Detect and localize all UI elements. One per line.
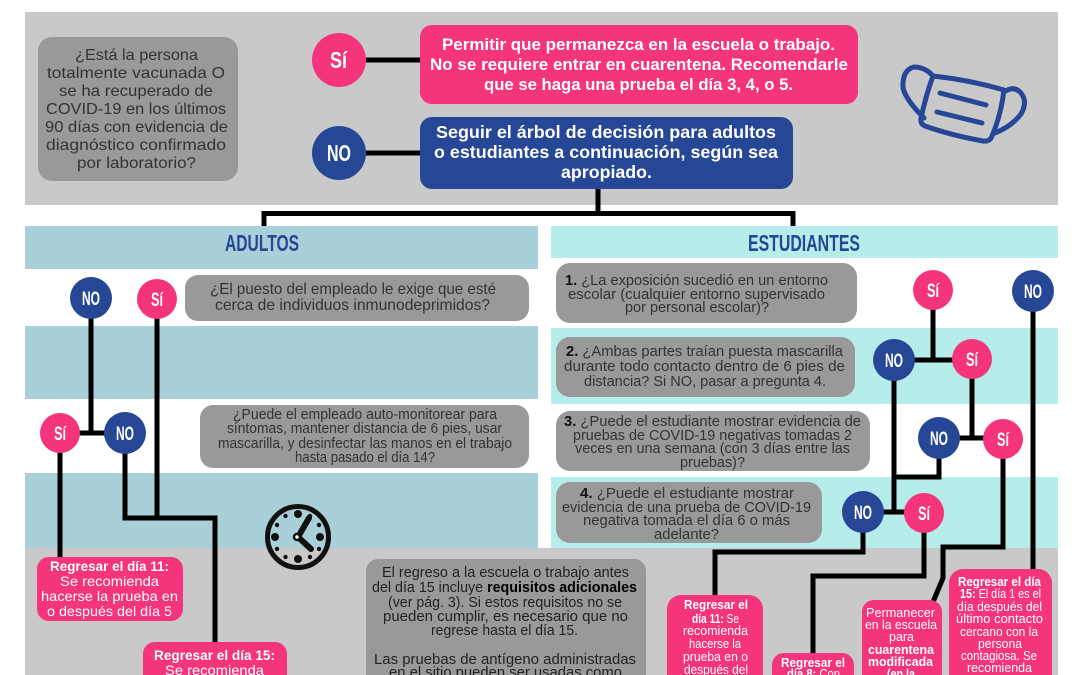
outcome: modified quarantine: para xyxy=(889,630,914,644)
callout: follow decision tree xyxy=(420,117,793,189)
question 4: students: negativa tomada el día 6 o más xyxy=(583,512,790,529)
badge: adults no 1 xyxy=(70,277,112,319)
question 4: students: 4. ¿Puede el estudiante mostrar xyxy=(580,485,794,502)
question: vaccinated or recovered: ¿Está la persona xyxy=(75,47,198,64)
question: adults self-monitor: mascarilla, y desinfectar las manos en el trabajo xyxy=(218,436,512,452)
question: adults self-monitor xyxy=(200,405,529,468)
connector lines: students tree xyxy=(715,290,1033,655)
outcome: modified quarantine: Permanecer xyxy=(866,606,935,620)
question: vaccinated or recovered: COVID-19 en los últimos xyxy=(46,101,226,118)
badge: top yes: Sí xyxy=(330,47,348,73)
callout: follow decision tree: Seguir el árbol de decisión para adultos xyxy=(436,122,776,142)
note: additional requirements: Las pruebas de antígeno administradas xyxy=(374,652,636,668)
panel: top vaccination question xyxy=(25,12,1058,205)
badge: student q4 yes xyxy=(904,493,944,533)
question 4: students: adelante? xyxy=(654,526,719,543)
outcome: adults return day 15: Regresar el día 15: xyxy=(154,647,275,663)
badge: student q3 no: NO xyxy=(930,429,948,450)
badge: adults no 1: NO xyxy=(82,289,100,310)
badge: student q1 no: NO xyxy=(1024,282,1042,303)
outcome: adults return day 11: o después del día 5 xyxy=(47,603,172,619)
note: additional requirements: (ver pág. 3). Si estos requisitos no se xyxy=(388,595,622,611)
outcome: adults return day 11 xyxy=(37,557,183,621)
outcome: students return day 15: día después del xyxy=(957,600,1042,614)
question: vaccinated or recovered: se ha recuperado de xyxy=(59,83,213,100)
badge: student q4 no xyxy=(842,491,884,533)
badge: adults yes 1: Sí xyxy=(151,290,163,311)
question 3: students: pruebas de COVID-19 negativas tomadas 2 xyxy=(573,427,852,444)
callout: follow decision tree: o estudiantes a continuación, según sea xyxy=(434,142,778,162)
question 4: students xyxy=(556,482,822,543)
callout: stay at school or work: No se requiere entrar en cuarentena. Recomendarle xyxy=(430,55,848,74)
question 1: students: 1. ¿La exposición sucedió en un entorno xyxy=(565,272,828,289)
outcome: adults return day 11: Se recomienda xyxy=(60,573,159,589)
question: vaccinated or recovered: diagnóstico confirmado xyxy=(46,137,226,154)
callout: stay at school or work: que se haga una prueba el día 3, 4, o 5. xyxy=(484,75,793,94)
badge: top yes xyxy=(312,33,366,87)
question: adults job: cerca de individuos inmunodeprimidos? xyxy=(215,297,490,314)
callout: follow decision tree: apropiado. xyxy=(561,162,652,182)
panel: adults header xyxy=(25,226,538,269)
badge: student q2 no xyxy=(873,339,915,381)
outcome: adults return day 11: hacerse la prueba en xyxy=(41,588,178,604)
badge: student q3 yes: Sí xyxy=(997,430,1009,451)
icon: clock xyxy=(268,506,328,568)
outcome: adults return day 15 xyxy=(143,642,287,675)
question 1: students: escolar (cualquier entorno supervisado xyxy=(568,286,825,303)
note: additional requirements xyxy=(366,559,646,675)
panel: students header xyxy=(551,226,1058,258)
badge: student q3 no xyxy=(918,417,960,459)
badge: student q2 yes: Sí xyxy=(966,350,978,371)
question 2: students: 2. ¿Ambas partes traían puesta mascarilla xyxy=(566,343,844,360)
badge: student q2 yes xyxy=(952,339,992,379)
panel: adults band 2 xyxy=(25,326,538,399)
outcome: students return day 8: Regresar el xyxy=(781,656,845,670)
badge: student q4 no: NO xyxy=(854,503,872,524)
badge: student q1 yes xyxy=(913,270,953,310)
badge: adults yes 2: Sí xyxy=(54,424,66,445)
outcome: students return day 15: último contacto xyxy=(956,612,1043,626)
badge: student q4 yes: Sí xyxy=(918,504,930,525)
outcome: modified quarantine: cuarentena xyxy=(868,643,935,657)
badge: top no xyxy=(312,126,366,180)
question: vaccinated or recovered: totalmente vacunada O xyxy=(47,65,225,82)
outcome: students return day 15: persona xyxy=(978,637,1022,651)
badge: adults yes 1 xyxy=(137,279,177,319)
question 3: students xyxy=(556,411,870,471)
outcome: students return day 15: recomienda xyxy=(967,661,1032,675)
outcome: students return day 11 xyxy=(667,595,763,675)
panel: students band 4 xyxy=(551,477,1058,548)
connector lines: top tree xyxy=(264,60,793,226)
question 4: students: evidencia de una prueba de COVID-19 xyxy=(562,499,811,516)
badge: student q2 no: NO xyxy=(885,351,903,372)
outcome: modified quarantine: modificada xyxy=(868,655,934,669)
question 1: students: por personal escolar)? xyxy=(625,299,769,316)
badge: adults no 2: NO xyxy=(116,424,134,445)
outcome: students return day 11: Regresar el xyxy=(684,598,748,612)
outcome: students return day 15: Regresar el día xyxy=(958,575,1042,589)
question 3: students: pruebas)? xyxy=(680,454,745,471)
question: adults self-monitor: síntomas, mantener distancia de 6 pies, usar xyxy=(227,421,502,437)
badge: student q3 yes xyxy=(983,419,1023,459)
badge: top no: NO xyxy=(327,140,351,166)
panel: students band 2 xyxy=(551,328,1058,404)
panel: adults band 4 xyxy=(25,473,538,548)
question 2: students: durante todo contacto dentro de 6 pies de xyxy=(564,358,845,375)
question 3: students: 3. ¿Puede el estudiante mostrar evidencia de xyxy=(564,413,861,430)
question: adults job xyxy=(185,275,529,321)
callout: stay at school or work: Permitir que permanezca en la escuela o trabajo. xyxy=(442,35,835,54)
outcome: students return day 11: prueba en o xyxy=(683,650,748,664)
connector lines: adults tree xyxy=(60,298,215,645)
panel: bottom outcomes xyxy=(25,548,1058,675)
question 2: students: distancia? Si NO, pasar a pregunta 4. xyxy=(584,373,826,390)
outcome: students return day 15: cercano con la xyxy=(960,625,1038,639)
badge: student q1 yes: Sí xyxy=(927,281,939,302)
question 3: students: veces en una semana (con 3 días entre las xyxy=(575,440,850,457)
badge: adults yes 2 xyxy=(40,413,80,453)
outcome: modified quarantine: en la escuela xyxy=(865,618,937,632)
note: additional requirements: pueden cumplir, es necesario que no xyxy=(383,609,628,625)
outcome: students return day 15 xyxy=(949,569,1052,675)
question: vaccinated or recovered xyxy=(38,37,238,181)
question: adults job: ¿El puesto del empleado le exige que esté xyxy=(210,281,496,298)
badge: student q1 no xyxy=(1012,270,1054,312)
question 2: students xyxy=(556,337,855,397)
outcome: students return day 15: contagiosa. Se xyxy=(961,649,1037,663)
question: adults self-monitor: ¿Puede el empleado auto-monitorear para xyxy=(233,407,498,423)
heading: adults: ADULTOS xyxy=(225,230,299,256)
outcome: students return day 11: hacerse la xyxy=(689,637,741,651)
outcome: students return day 11: recomienda xyxy=(683,624,748,638)
outcome: modified quarantine xyxy=(862,600,942,675)
note: additional requirements: regrese hasta el día 15. xyxy=(431,623,578,639)
outcome: adults return day 11: Regresar el día 11: xyxy=(50,558,169,574)
note: additional requirements: El regreso a la escuela o trabajo antes xyxy=(382,565,629,581)
question: adults self-monitor: hasta pasado el día 14? xyxy=(295,450,435,466)
outcome: students return day 8 xyxy=(772,653,854,675)
callout: stay at school or work xyxy=(420,25,858,104)
question: vaccinated or recovered: 90 días con evidencia de xyxy=(45,119,228,136)
question 1: students xyxy=(556,263,857,323)
note: additional requirements: del día 15 incluye requisitos adicionales xyxy=(372,580,637,596)
question: vaccinated or recovered: por laboratorio? xyxy=(77,155,196,172)
heading: students: ESTUDIANTES xyxy=(748,230,860,256)
outcome: students return day 11: día 11: Se xyxy=(692,612,739,626)
outcome: students return day 15: 15: El día 1 es el xyxy=(960,587,1041,601)
icon: face mask xyxy=(903,67,1024,141)
badge: adults no 2 xyxy=(104,412,146,454)
